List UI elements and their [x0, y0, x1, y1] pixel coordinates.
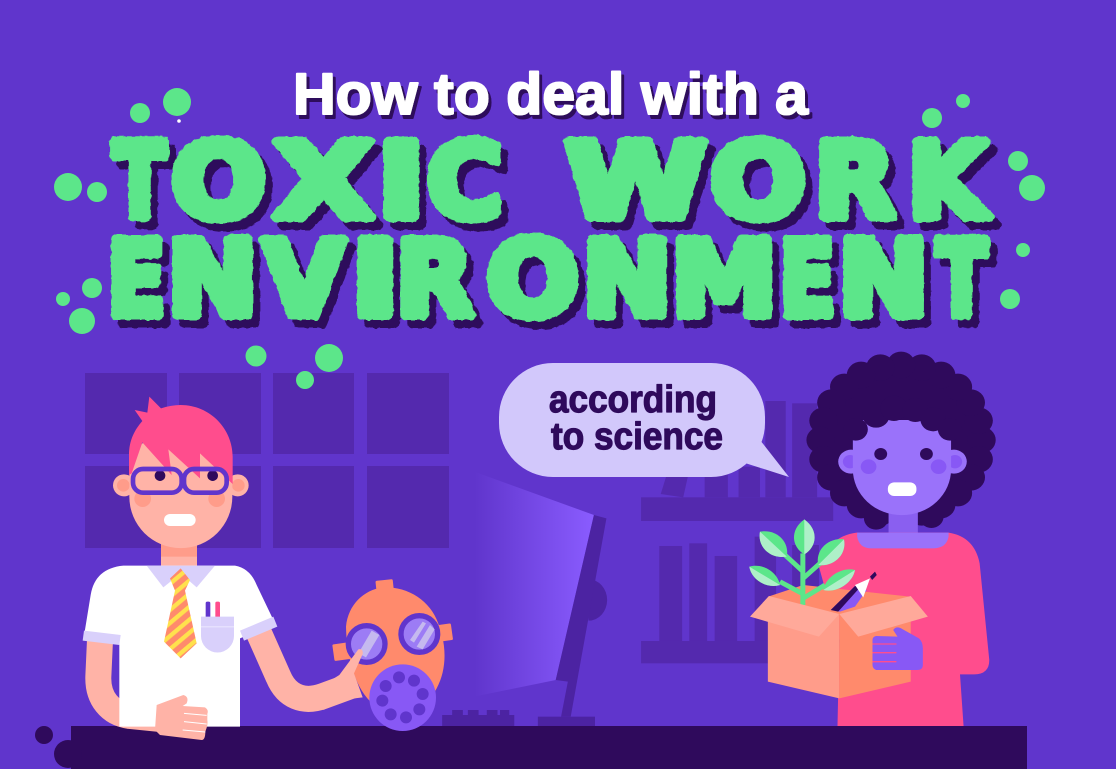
title: Toxic Work Environment: R	[396, 220, 473, 340]
title: Toxic Work Environment: V	[263, 220, 344, 340]
plant	[749, 519, 855, 605]
title line: How to deal with a: How to deal with a	[293, 62, 809, 127]
dress	[819, 533, 989, 726]
man with glasses	[83, 397, 453, 740]
gas mask	[323, 579, 453, 731]
title: Toxic Work Environment: R	[815, 122, 895, 242]
title: Toxic Work Environment: T	[936, 220, 987, 340]
title: Toxic Work Environment: N	[838, 220, 928, 340]
neck	[889, 507, 918, 540]
neck	[161, 537, 197, 568]
mouth	[164, 514, 196, 526]
eyes	[155, 470, 165, 481]
title: Toxic Work Environment: E	[780, 220, 835, 340]
afro hair	[806, 352, 996, 530]
fringe	[844, 396, 962, 441]
glasses	[133, 469, 227, 493]
mask filter	[369, 664, 436, 731]
tie	[164, 568, 197, 658]
title: Toxic Work Environment: T	[113, 122, 166, 242]
box back	[768, 585, 910, 615]
bookshelves	[641, 401, 833, 663]
title: Toxic Work Environment: I	[352, 220, 399, 340]
speech bubble: according to science: according	[549, 379, 717, 421]
eyes	[874, 448, 887, 460]
keyboard	[442, 710, 514, 726]
title: Toxic Work Environment: M	[671, 220, 777, 340]
title: Toxic Work Environment: C	[427, 122, 502, 242]
title: Toxic Work Environment: O	[710, 122, 806, 242]
pencil	[831, 572, 877, 612]
title: Toxic Work Environment: N	[167, 220, 258, 340]
ears	[113, 474, 135, 496]
cheeks	[861, 459, 876, 474]
face	[853, 420, 951, 515]
hair	[129, 397, 233, 484]
desk	[35, 726, 1027, 769]
pens and pocket	[206, 602, 210, 618]
mouth	[888, 482, 916, 496]
title: Toxic Work Environment: N	[582, 220, 671, 340]
monitor	[474, 472, 607, 726]
left arm	[98, 640, 163, 719]
background shelves and monitor	[442, 401, 833, 726]
cuffs	[83, 631, 121, 645]
title: Toxic Work Environment: X	[274, 122, 373, 242]
box	[750, 596, 928, 698]
speech bubble: according to science	[499, 363, 789, 477]
ears	[838, 450, 864, 474]
collar	[857, 533, 949, 548]
title: Toxic Work Environment: W	[566, 122, 706, 242]
title: Toxic Work Environment: K	[908, 122, 990, 242]
title: Toxic Work Environment: E	[107, 220, 165, 340]
right arm	[258, 632, 353, 699]
shirt	[83, 566, 275, 727]
title: Toxic Work Environment: O	[487, 220, 578, 340]
cheeks	[134, 490, 151, 507]
title: Toxic Work Environment: O	[172, 122, 266, 242]
hand on mask	[323, 649, 363, 710]
hand	[155, 695, 208, 740]
speech bubble: according to science: to science	[551, 416, 723, 458]
title: Toxic Work Environment	[107, 122, 990, 340]
title: Toxic Work Environment: I	[378, 122, 425, 242]
collar	[147, 566, 215, 587]
woman holding box	[749, 352, 996, 726]
toxic bubbles	[54, 88, 1045, 389]
face	[129, 434, 232, 548]
background window panes	[85, 373, 449, 548]
hand	[872, 627, 923, 670]
